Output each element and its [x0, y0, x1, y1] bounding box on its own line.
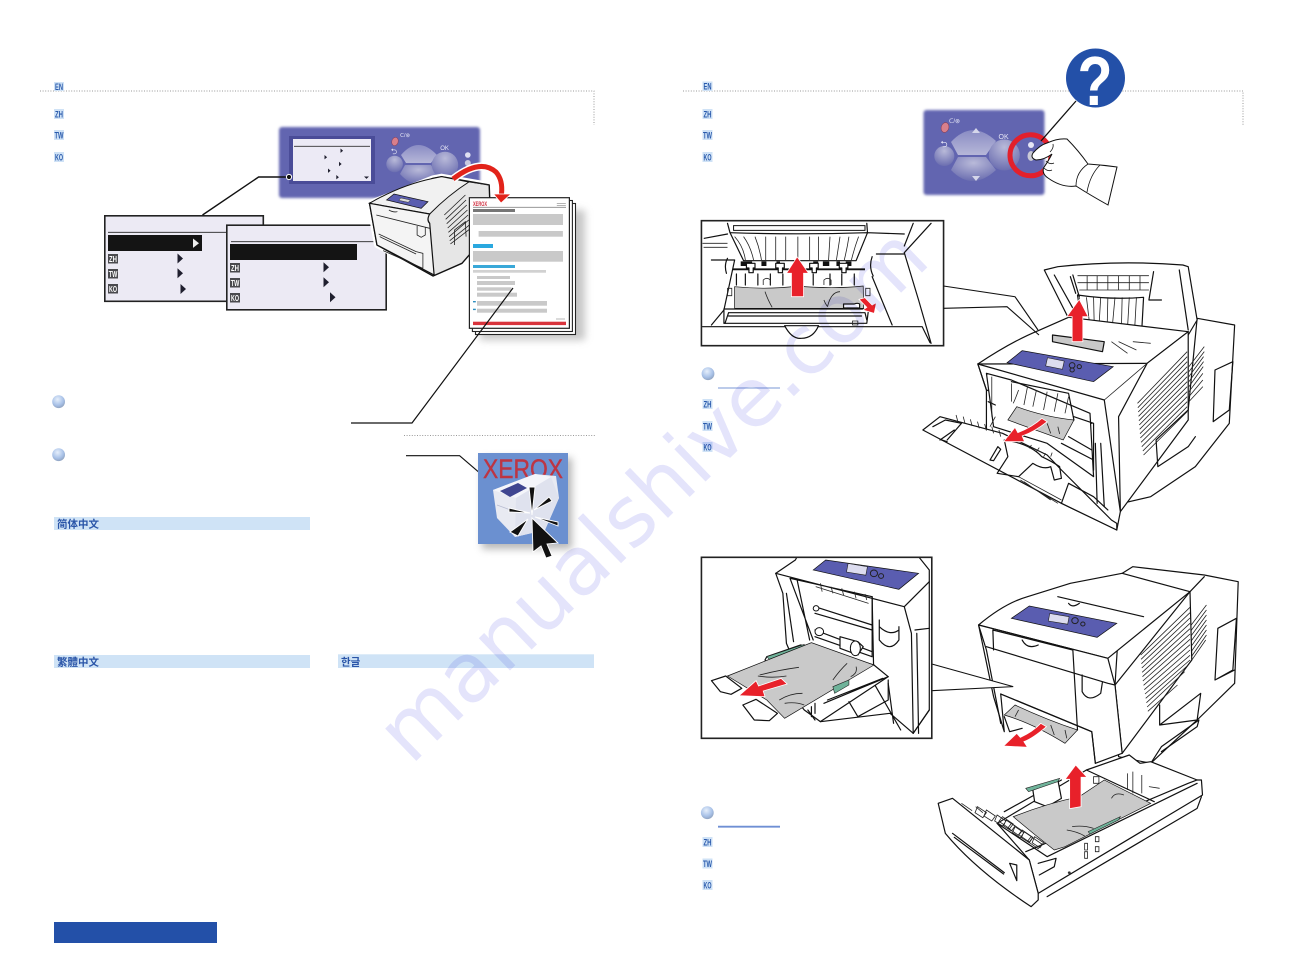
- printer side: [1119, 332, 1188, 512]
- printer front: [978, 364, 1120, 530]
- menu 2 language rows: [230, 262, 336, 303]
- leader line: control panel to menus: [202, 174, 292, 215]
- icon: hand pressing help button: [1032, 139, 1117, 205]
- language tags: step 2: ZH: [704, 837, 712, 847]
- inset leader lines A: [944, 286, 1039, 335]
- language bar: simplified chinese: 简体中文: [57, 518, 99, 530]
- front page: [469, 198, 569, 328]
- language tags: step 2: [702, 837, 712, 890]
- open door: [923, 417, 1117, 530]
- jam illustration A: inset: [701, 221, 944, 346]
- tray: [997, 755, 1202, 893]
- control panel: right page: ᑕ/⊗: [949, 119, 960, 125]
- language tags: right page header: TW: [703, 130, 712, 140]
- paper in slot: [1001, 694, 1095, 763]
- jam illustration B: inset: [701, 557, 1013, 738]
- control panel: right page: [924, 110, 1044, 195]
- language tags: left page header: [54, 82, 64, 162]
- watermark: manualshive.com: [359, 209, 946, 780]
- language bar: traditional chinese: [54, 655, 310, 668]
- printer top: [978, 317, 1188, 364]
- language tags: right page header: KO: [704, 152, 712, 162]
- language tags: step 1: TW: [703, 421, 712, 431]
- tray front: [938, 798, 1038, 907]
- right page header rule: [683, 91, 1243, 125]
- language tags: left page header: EN: [55, 82, 63, 92]
- language bar: simplified chinese: [54, 517, 310, 530]
- language tags: step 2: KO: [704, 880, 712, 890]
- menu 2 language rows: ZH: [231, 263, 239, 273]
- language tags: right page header: [702, 81, 712, 162]
- language tags: left page header: KO: [55, 152, 63, 162]
- language tags: left page header: TW: [54, 130, 64, 140]
- section rule: [404, 434, 595, 436]
- language tags: right page header: EN: [704, 81, 712, 91]
- jam red arrows: [1004, 418, 1047, 442]
- icon: small printer: [370, 177, 491, 276]
- step bullet 2: [52, 448, 65, 461]
- red highlight ring: [1010, 135, 1051, 176]
- control panel: left page: [279, 127, 480, 198]
- jam illustration B: printer and tray: [938, 567, 1238, 907]
- front: [979, 625, 1122, 763]
- left page header rule: [40, 91, 594, 125]
- multipurpose tray: [765, 645, 888, 722]
- top: [979, 573, 1190, 658]
- step bullet 1: [52, 395, 65, 408]
- language tags: left page header: ZH: [55, 109, 63, 119]
- control panel: left page: ⮌: [391, 147, 397, 156]
- language bar: korean: [338, 654, 594, 668]
- menu screen 1: [105, 216, 263, 301]
- control panel: right page: OK: [999, 134, 1009, 141]
- icon: desktop printer shortcut: XEROX: [483, 454, 563, 484]
- red curved arrow: printer to pages: [453, 166, 511, 203]
- control panel: left page: OK: [440, 146, 449, 152]
- language tags: step 1: ZH: [704, 399, 712, 409]
- language tags: step 1: [702, 399, 712, 452]
- step bullet: right page 1: [702, 367, 780, 388]
- leader line: help button to question icon: [1041, 101, 1076, 141]
- control panel: left page: ᑕ/⊗: [400, 133, 411, 139]
- control panel: right page: ⮌: [940, 139, 948, 149]
- language tags: right page header: ZH: [704, 109, 712, 119]
- leader line: page to text: [351, 288, 513, 423]
- menu 1 language rows: TW: [109, 269, 118, 279]
- footer blue bar: [54, 922, 217, 943]
- language tags: step 1: KO: [704, 442, 712, 452]
- menu 2 language rows: KO: [231, 293, 239, 303]
- rear body: [1122, 318, 1235, 503]
- menu 1 language rows: [108, 254, 186, 294]
- side: [1115, 592, 1192, 753]
- menu 1 language rows: ZH: [109, 254, 117, 264]
- printer interior: [986, 373, 1094, 477]
- language bar: korean: 한글: [341, 656, 361, 668]
- icon: desktop printer shortcut: [478, 453, 572, 558]
- front page: XEROX: [473, 202, 487, 208]
- rear: [1115, 567, 1238, 763]
- menu 1 language rows: KO: [109, 284, 117, 294]
- step bullet: right page 2: [701, 806, 780, 827]
- leader line: icon: [406, 456, 492, 483]
- menu screen 2: [227, 225, 386, 310]
- menu 2 language rows: TW: [231, 278, 240, 288]
- icon: question mark: ?: [1078, 42, 1112, 120]
- printed pages stack: [469, 198, 585, 340]
- open lid: [1044, 263, 1197, 335]
- language tags: step 2: TW: [703, 859, 712, 869]
- language bar: traditional chinese: 繁體中文: [57, 656, 99, 668]
- jam illustration A: printer: [923, 263, 1235, 530]
- LCD screen: [289, 136, 375, 184]
